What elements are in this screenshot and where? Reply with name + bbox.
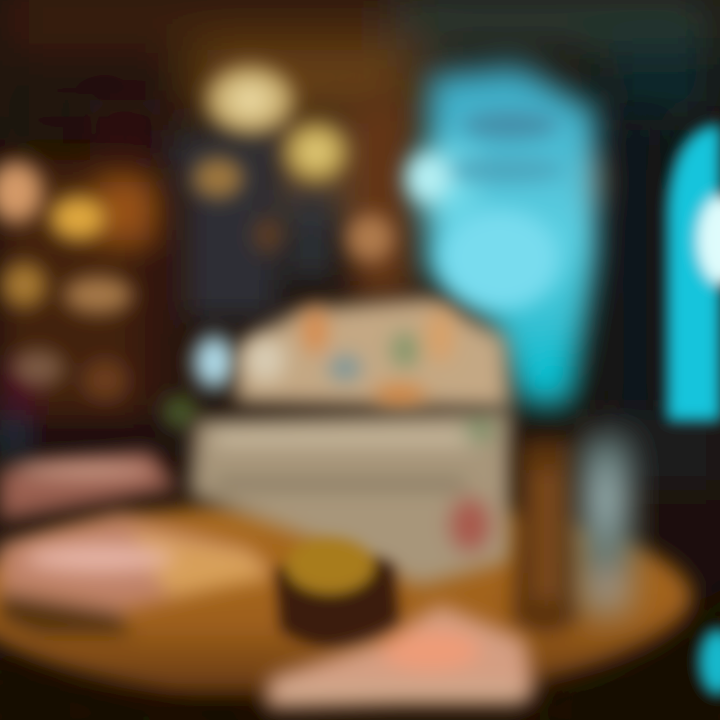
- pink papers on table: [265, 605, 535, 708]
- cyan panel highlights: [406, 111, 565, 310]
- open book on left: [0, 452, 275, 635]
- chart board colored marks: [245, 306, 454, 405]
- honey cup: [275, 537, 400, 648]
- chart board upper: [235, 298, 510, 408]
- right dark column: [590, 120, 720, 490]
- cyan window panel: [418, 65, 616, 405]
- ceiling and back wall: [0, 0, 720, 140]
- wooden pillar: [265, 100, 412, 300]
- book page highlights: [15, 462, 175, 572]
- hanging lamps: [193, 66, 394, 262]
- shelf glowing items: [0, 162, 132, 400]
- right window: [668, 125, 720, 420]
- left bookshelf: [0, 160, 190, 460]
- bottle: [512, 438, 580, 634]
- table rim shadow: [0, 580, 720, 720]
- glass jar: [580, 435, 632, 615]
- chart board lower: [190, 410, 512, 585]
- bottom right cyan glow: [700, 630, 720, 694]
- small blue glow: [162, 336, 234, 428]
- dark central cabinet: [90, 100, 335, 320]
- round wooden table: [0, 500, 720, 720]
